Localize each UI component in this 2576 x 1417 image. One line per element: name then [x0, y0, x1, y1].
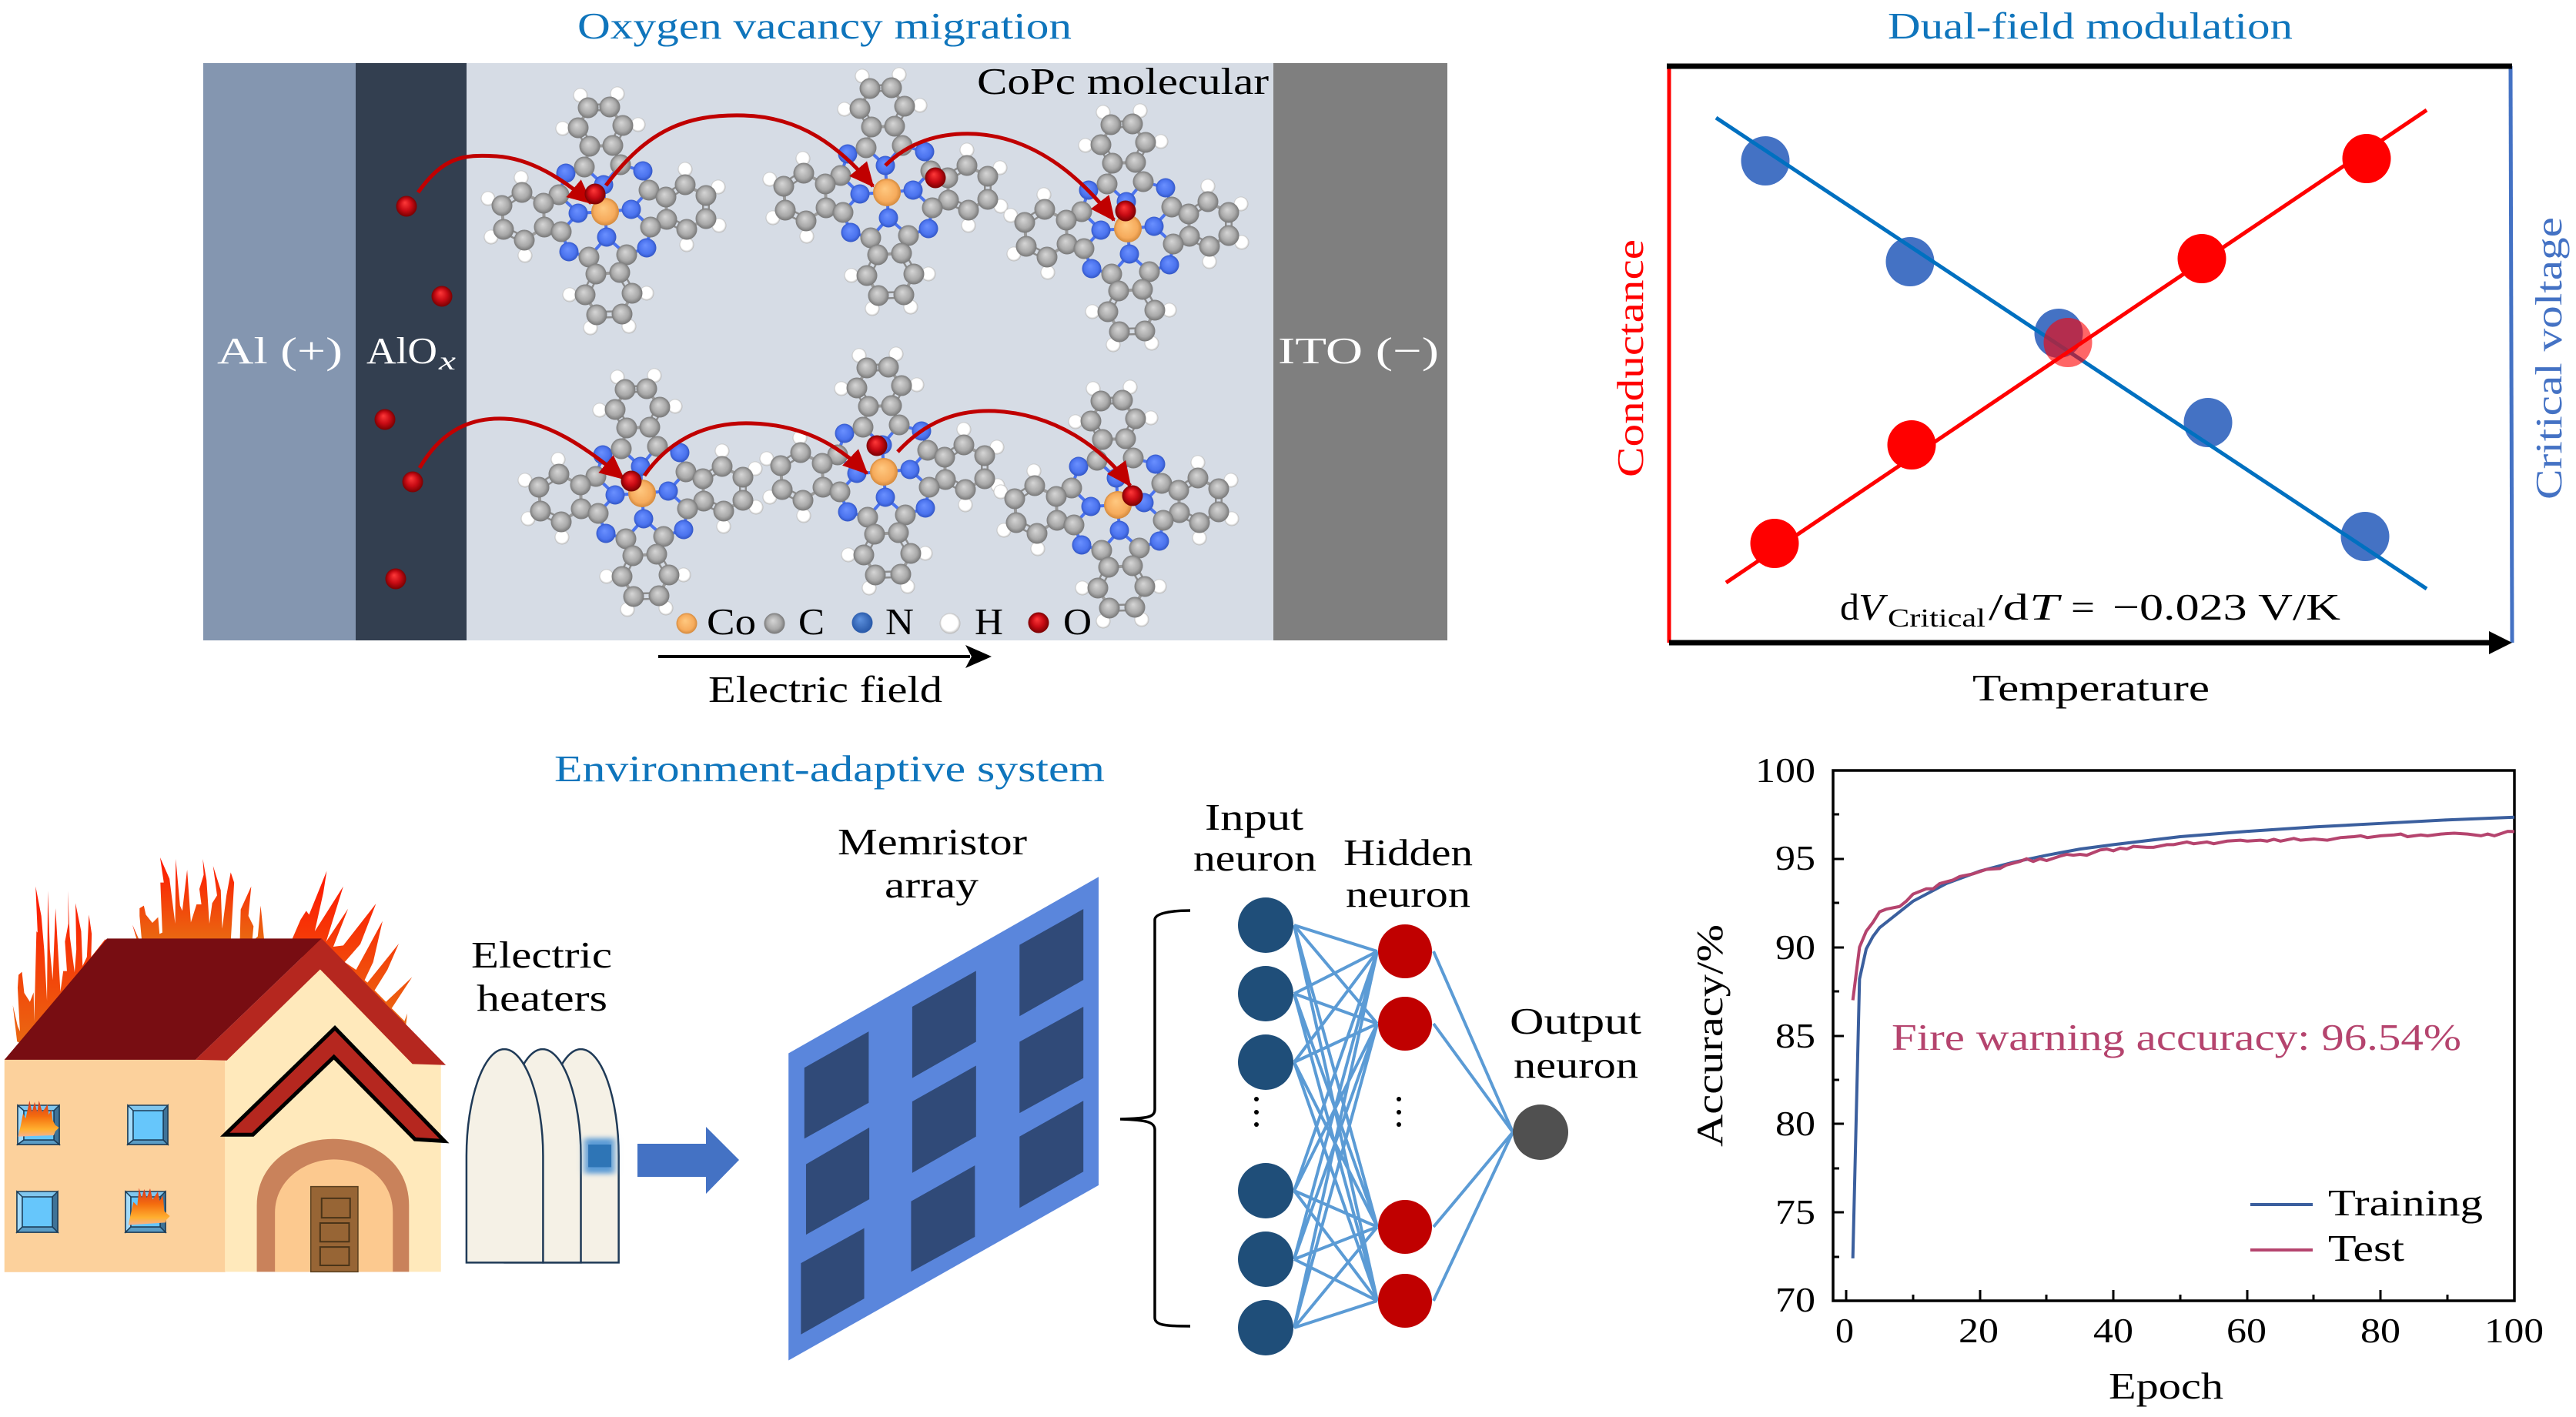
house body — [5, 938, 446, 1272]
label: ITO (−): ITO (−) — [1278, 329, 1439, 372]
y tick labels: 100 — [1755, 751, 1815, 790]
blue data points — [1741, 136, 2390, 561]
atom legend: Co — [707, 600, 756, 643]
y label: accuracy: Accuracy/% — [1688, 924, 1731, 1147]
window 2 — [128, 1105, 168, 1145]
x tick labels: 40 — [2093, 1312, 2133, 1350]
equation: T — [2029, 586, 2062, 628]
ticks — [1833, 814, 2514, 1301]
label: memristor array: Memristor — [838, 820, 1027, 863]
labels: neuron layers: neuron — [1514, 1044, 1638, 1086]
panel: accuracy chart — [1688, 751, 2544, 1407]
label: electric heaters: heaters — [477, 977, 607, 1019]
arch — [257, 1139, 409, 1272]
icon: electric heaters — [467, 1049, 619, 1262]
legend: Test — [2328, 1227, 2404, 1269]
x tick labels: 20 — [1959, 1312, 1999, 1350]
title: dual-field modulation: Dual-field modulation — [1888, 5, 2293, 47]
y tick labels: 90 — [1775, 928, 1815, 967]
hidden neurons — [1378, 924, 1432, 1328]
molecule top 3 — [1004, 103, 1249, 353]
brace — [1120, 911, 1190, 1326]
red trend line — [1726, 110, 2427, 583]
y tick labels: 75 — [1775, 1193, 1815, 1232]
legend — [2250, 1181, 2483, 1269]
test curve — [1853, 831, 2514, 1001]
atom legend: H — [975, 600, 1003, 643]
label: AlOx — [366, 329, 456, 376]
y label: critical voltage: Critical voltage — [2527, 217, 2570, 500]
icon: burning house — [5, 857, 446, 1272]
equation — [1840, 586, 2340, 633]
wall right — [225, 969, 441, 1272]
panel: dual-field modulation — [1609, 5, 2570, 709]
red data points — [1751, 134, 2391, 568]
y tick labels: 80 — [1775, 1105, 1815, 1143]
door — [311, 1187, 358, 1272]
roof gable — [196, 938, 446, 1065]
x tick labels: 100 — [2484, 1312, 2544, 1350]
training curve — [1853, 817, 2514, 1258]
molecule bottom 1 — [517, 368, 764, 617]
atom legend — [676, 600, 1092, 643]
title: oxygen vacancy migration: Oxygen vacancy migration — [577, 5, 1072, 47]
molecule top 2 — [762, 68, 1009, 316]
layer: Al electrode — [203, 63, 356, 640]
molecule top 1 — [480, 86, 727, 336]
y tick labels — [1755, 751, 1815, 1319]
oxygen atoms — [374, 168, 1142, 590]
label: memristor array: array — [885, 864, 979, 906]
output neuron — [1513, 1105, 1568, 1160]
x label: epoch: Epoch — [2109, 1365, 2223, 1407]
labels: neuron layers: neuron — [1346, 873, 1470, 915]
legend: Training — [2328, 1181, 2483, 1224]
window 4 — [125, 1191, 166, 1232]
molecule bottom 2 — [759, 346, 1005, 596]
label: memristor array — [838, 820, 1027, 906]
window 1 — [18, 1105, 59, 1145]
annotation: fire warning accuracy: Fire warning accuracy: 96.54% — [1892, 1016, 2461, 1058]
panel: environment-adaptive system — [5, 747, 1641, 1361]
equation: = — [2071, 586, 2095, 628]
neural network connections — [1294, 925, 1513, 1328]
x tick labels — [1835, 1312, 2544, 1350]
label: CoPc molecular: CoPc molecular — [977, 60, 1269, 102]
wall left — [5, 1058, 226, 1272]
equation: d — [1840, 586, 1859, 628]
axis frame — [1667, 66, 2512, 654]
equation: −0.023 V/K — [2113, 586, 2340, 628]
chevron — [225, 1028, 444, 1141]
x tick labels: 80 — [2360, 1312, 2400, 1350]
y tick labels: 95 — [1775, 839, 1815, 877]
title: environment-adaptive system: Environment-adaptive system — [554, 747, 1105, 790]
migration arrows — [418, 115, 1130, 486]
arrow: electric field — [658, 645, 992, 668]
x tick labels: 0 — [1835, 1312, 1854, 1350]
labels: neuron layers: Hidden — [1343, 831, 1473, 874]
y label: conductance: Conductance — [1609, 239, 1651, 477]
input neurons — [1238, 897, 1293, 1355]
equation: Critical — [1888, 604, 1986, 633]
label: electric heaters — [471, 934, 612, 1019]
layer: AlOx — [356, 63, 467, 640]
labels: neuron layers: Input — [1205, 796, 1303, 838]
label: AlOx: x — [438, 347, 456, 376]
y tick labels: 70 — [1775, 1281, 1815, 1319]
label: Al (+): Al (+) — [217, 329, 343, 372]
label: electric field: Electric field — [708, 668, 942, 710]
equation: /d — [1989, 586, 2029, 628]
y tick labels: 85 — [1775, 1017, 1815, 1055]
x tick labels: 60 — [2226, 1312, 2267, 1350]
label: electric heaters: Electric — [471, 934, 612, 976]
icon: memristor array — [788, 877, 1099, 1361]
panel: oxygen vacancy migration — [203, 5, 1447, 710]
roof — [5, 938, 322, 1060]
chart frame — [1833, 770, 2514, 1301]
label: AlOx: AlO — [366, 329, 437, 372]
atom legend: C — [798, 600, 825, 643]
layer: CoPc molecular — [467, 63, 1273, 640]
flames — [13, 857, 412, 1047]
arrow: heaters to memristor array — [637, 1127, 739, 1194]
equation: V — [1858, 586, 1889, 628]
labels: neuron layers: Output — [1510, 1000, 1641, 1042]
x label: temperature: Temperature — [1972, 667, 2210, 709]
blue trend line — [1716, 118, 2427, 589]
layer: ITO electrode — [1273, 63, 1447, 640]
atom legend: O — [1063, 600, 1092, 643]
atom legend: N — [885, 600, 914, 643]
window flames — [18, 1101, 170, 1225]
window 3 — [17, 1191, 58, 1232]
labels: neuron layers — [1193, 796, 1641, 1086]
labels: neuron layers: neuron — [1193, 837, 1316, 879]
molecule bottom 3 — [993, 380, 1239, 628]
